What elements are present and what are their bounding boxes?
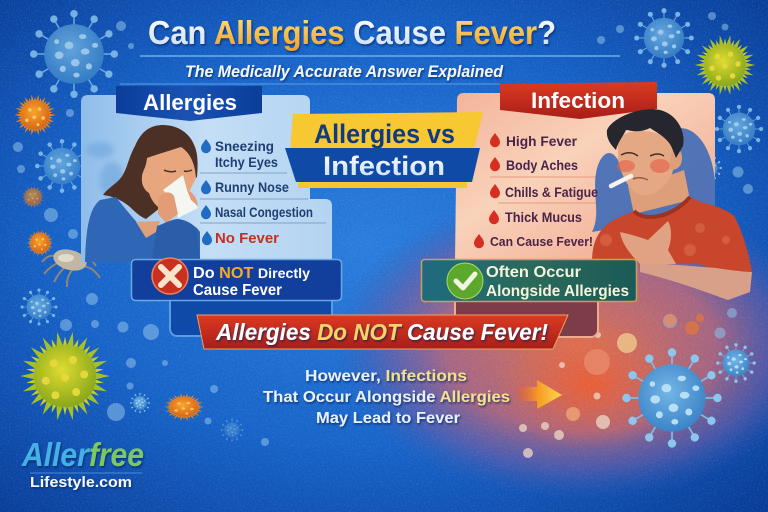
dust mite xyxy=(42,246,100,287)
pollen: yellow-green large xyxy=(19,330,111,422)
illustration: sick man xyxy=(592,109,752,300)
icon: green check xyxy=(447,263,483,299)
callout: often occur alongside allergies: Often Occur xyxy=(486,264,581,281)
panel lower frame xyxy=(170,258,332,336)
title rule xyxy=(140,55,620,57)
hair xyxy=(607,109,684,158)
list: infection symptoms xyxy=(474,133,598,249)
banner: Allergies: Allergies xyxy=(143,90,237,115)
center badge: allergies vs infection xyxy=(285,112,483,188)
item: sneezing: Sneezing xyxy=(215,138,274,154)
center badge: allergies vs infection: Allergies vs xyxy=(314,119,455,149)
virus: left mid xyxy=(35,139,89,193)
icon: red x xyxy=(152,258,188,294)
virus: faded xyxy=(221,419,243,441)
panel: infection xyxy=(455,82,752,337)
callout: often occur alongside allergies xyxy=(422,260,636,302)
collar xyxy=(634,197,690,217)
pollen: olive orange xyxy=(26,229,54,257)
center badge: allergies vs infection: Infection xyxy=(323,151,445,181)
panel lower frame xyxy=(455,258,598,337)
splatter in panel xyxy=(86,142,124,198)
virus: small teal xyxy=(130,393,150,413)
shirt xyxy=(592,197,752,272)
virus: right small xyxy=(696,155,722,181)
banner: allergies do not cause fever xyxy=(197,315,568,349)
panel separators xyxy=(490,177,598,203)
thermometer xyxy=(611,176,631,186)
logo: Lifestyle.com xyxy=(30,474,132,491)
banner: Infection: Infection xyxy=(531,88,625,113)
callout: do not directly cause fever xyxy=(132,258,342,300)
arrow xyxy=(518,380,562,409)
face xyxy=(618,131,675,195)
list: allergy symptoms xyxy=(201,138,313,247)
neck xyxy=(628,170,690,214)
pale spores near infection virus xyxy=(519,314,704,458)
pollen: small orange xyxy=(163,393,205,421)
virus: right xyxy=(715,105,763,153)
item: no fever: No Fever xyxy=(215,230,279,247)
item: nasal congestion: Nasal Congestion xyxy=(215,204,313,220)
explanation text: However, Infections xyxy=(305,368,467,385)
panel body xyxy=(455,93,715,262)
panel body xyxy=(81,95,332,262)
explanation text: May Lead to Fever xyxy=(316,410,460,427)
virus: top right xyxy=(634,8,694,68)
hot core of glow xyxy=(495,320,685,450)
illustration: woman sneezing xyxy=(85,125,200,262)
item: high fever: High Fever xyxy=(506,133,578,149)
pollen: orange left xyxy=(14,94,56,136)
faded orange virus in glow xyxy=(584,349,610,375)
banner: Infection xyxy=(500,82,657,119)
panel: allergies xyxy=(81,86,332,336)
item: chills and fatigue: Chills & Fatigue xyxy=(505,184,598,200)
subtitle: The Medically Accurate Answer Explained xyxy=(185,63,504,81)
hand on chest xyxy=(620,221,676,264)
pollen: top right xyxy=(694,34,756,96)
explanation text: That Occur Alongside Allergies xyxy=(263,389,510,406)
item: itchy eyes: Itchy Eyes xyxy=(215,154,278,170)
callout: do not directly cause fever: Do NOT Directly xyxy=(193,265,310,282)
item: body aches: Body Aches xyxy=(506,157,578,173)
forearm xyxy=(640,262,752,300)
logo xyxy=(21,436,144,491)
title: Can Allergies Cause Fever? xyxy=(148,14,556,51)
virus: lower left xyxy=(21,289,57,325)
virus: bottom right small xyxy=(716,343,756,383)
item: runny nose: Runny Nose xyxy=(215,179,289,195)
callout: do not directly cause fever: Cause Fever xyxy=(193,282,282,299)
logo: Allerfree xyxy=(21,436,144,473)
callout: often occur alongside allergies: Alongside Allergies xyxy=(486,283,629,300)
shirt blotches xyxy=(600,223,730,256)
virus: large bottom right xyxy=(622,348,722,448)
blue splatter xyxy=(592,128,715,232)
explanation text xyxy=(263,368,510,427)
red fever glow xyxy=(335,190,768,500)
panel separators xyxy=(200,173,326,223)
banner: allergies do not cause fever: Allergies Do NOT Cause Fever! xyxy=(215,319,548,345)
virus: top left large xyxy=(30,10,118,98)
banner: Allergies xyxy=(116,86,262,121)
item: can cause fever: Can Cause Fever! xyxy=(490,234,593,249)
virus: small grey xyxy=(22,186,44,208)
item: thick mucus: Thick Mucus xyxy=(505,209,582,225)
